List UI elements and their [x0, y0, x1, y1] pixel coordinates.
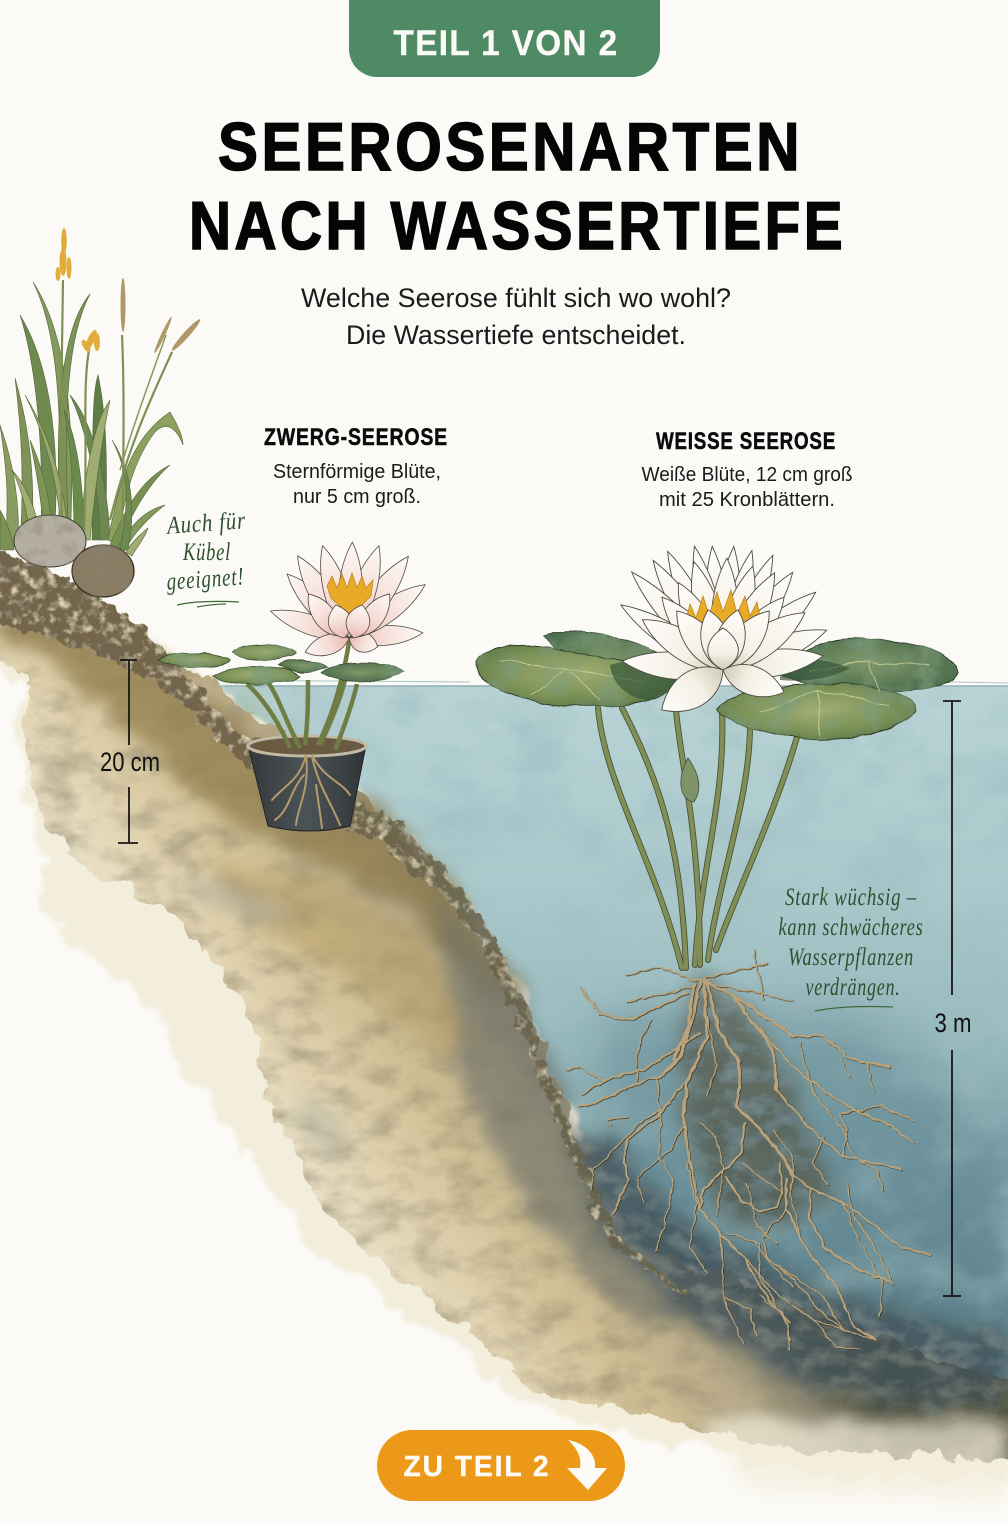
- plant: dwarf water lily in pot: [160, 542, 431, 831]
- pond water: [190, 680, 1008, 1400]
- subtitle: Die Wassertiefe entscheidet.: [346, 320, 686, 350]
- rocks on the bank: [14, 515, 134, 597]
- measure: 3 m depth: 3 m: [934, 1008, 972, 1038]
- dark silt on pond floor: [570, 1130, 1008, 1408]
- note: Auch für Kübel geeignet: Auch für: [164, 507, 247, 540]
- title: SEEROSENARTEN: [218, 109, 803, 185]
- white blossom: [615, 544, 831, 725]
- title badge: part 1 of 2: [349, 0, 660, 77]
- label: Zwerg-Seerose: [264, 424, 448, 508]
- label: Weisse Seerose: [642, 428, 852, 511]
- title: [189, 109, 846, 264]
- small pads: [160, 645, 404, 684]
- pale grey wash patches: [160, 880, 290, 930]
- grey shade along the slope: [430, 890, 720, 1330]
- note: Stark wüchsig: [778, 884, 924, 1011]
- dark topsoil: [0, 548, 372, 840]
- bud: [681, 758, 699, 802]
- note: Auch für Kübel geeignet: [164, 507, 247, 607]
- label: Zwerg-Seerose: Sternförmige Blüte,: [273, 461, 441, 483]
- slope edge line: [355, 800, 690, 1302]
- label: Weisse Seerose: WEISSE SEEROSE: [656, 428, 836, 455]
- note: Stark wüchsig: verdrängen.: [806, 974, 900, 1001]
- label: Zwerg-Seerose: ZWERG-SEEROSE: [264, 424, 448, 451]
- note: Stark wüchsig: Stark wüchsig –: [785, 884, 917, 911]
- plant: white water lily: [476, 544, 958, 1350]
- measure: 20 cm depth: 20 cm: [100, 747, 160, 777]
- pot: [248, 736, 366, 831]
- icon: curved down arrow: [567, 1440, 607, 1490]
- reeds and grasses on the bank: [0, 228, 202, 556]
- stems: [598, 708, 797, 968]
- measure: 20 cm depth: [100, 660, 160, 843]
- yellow flower spikes: [56, 228, 100, 354]
- pink blossom: [267, 542, 431, 662]
- note: Stark wüchsig: Wasserpflanzen: [788, 944, 914, 971]
- warm upper soil wash: [0, 600, 520, 990]
- stems: [247, 636, 357, 750]
- dark shade under blossom: [610, 659, 850, 700]
- note: Auch für Kübel geeignet: geeignet!: [166, 563, 245, 596]
- label: Zwerg-Seerose: nur 5 cm groß.: [293, 486, 421, 508]
- button: zu Teil 2: [377, 1430, 625, 1501]
- brown seed spikes: [120, 278, 202, 354]
- root mass: [672, 975, 835, 1225]
- button: zu Teil 2: ZU TEIL 2: [404, 1451, 550, 1483]
- label: Weisse Seerose: Weiße Blüte, 12 cm groß: [642, 464, 852, 486]
- soil bank cross-section: [0, 540, 1008, 1500]
- subtitle: Welche Seerose fühlt sich wo wohl?: [301, 283, 731, 313]
- subtitle: [301, 283, 731, 350]
- roots: [567, 950, 930, 1350]
- lily pads: [476, 632, 958, 740]
- label: Weisse Seerose: mit 25 Kronblättern.: [659, 489, 835, 511]
- note: Auch für Kübel geeignet: Kübel: [182, 539, 231, 566]
- measure: 3 m depth: [934, 701, 972, 1296]
- fade of lower right: [700, 1415, 1008, 1500]
- note: Stark wüchsig: kann schwächeres: [778, 914, 924, 941]
- title: NACH WASSERTIEFE: [189, 188, 846, 264]
- title badge: part 1 of 2: TEIL 1 VON 2: [394, 24, 618, 63]
